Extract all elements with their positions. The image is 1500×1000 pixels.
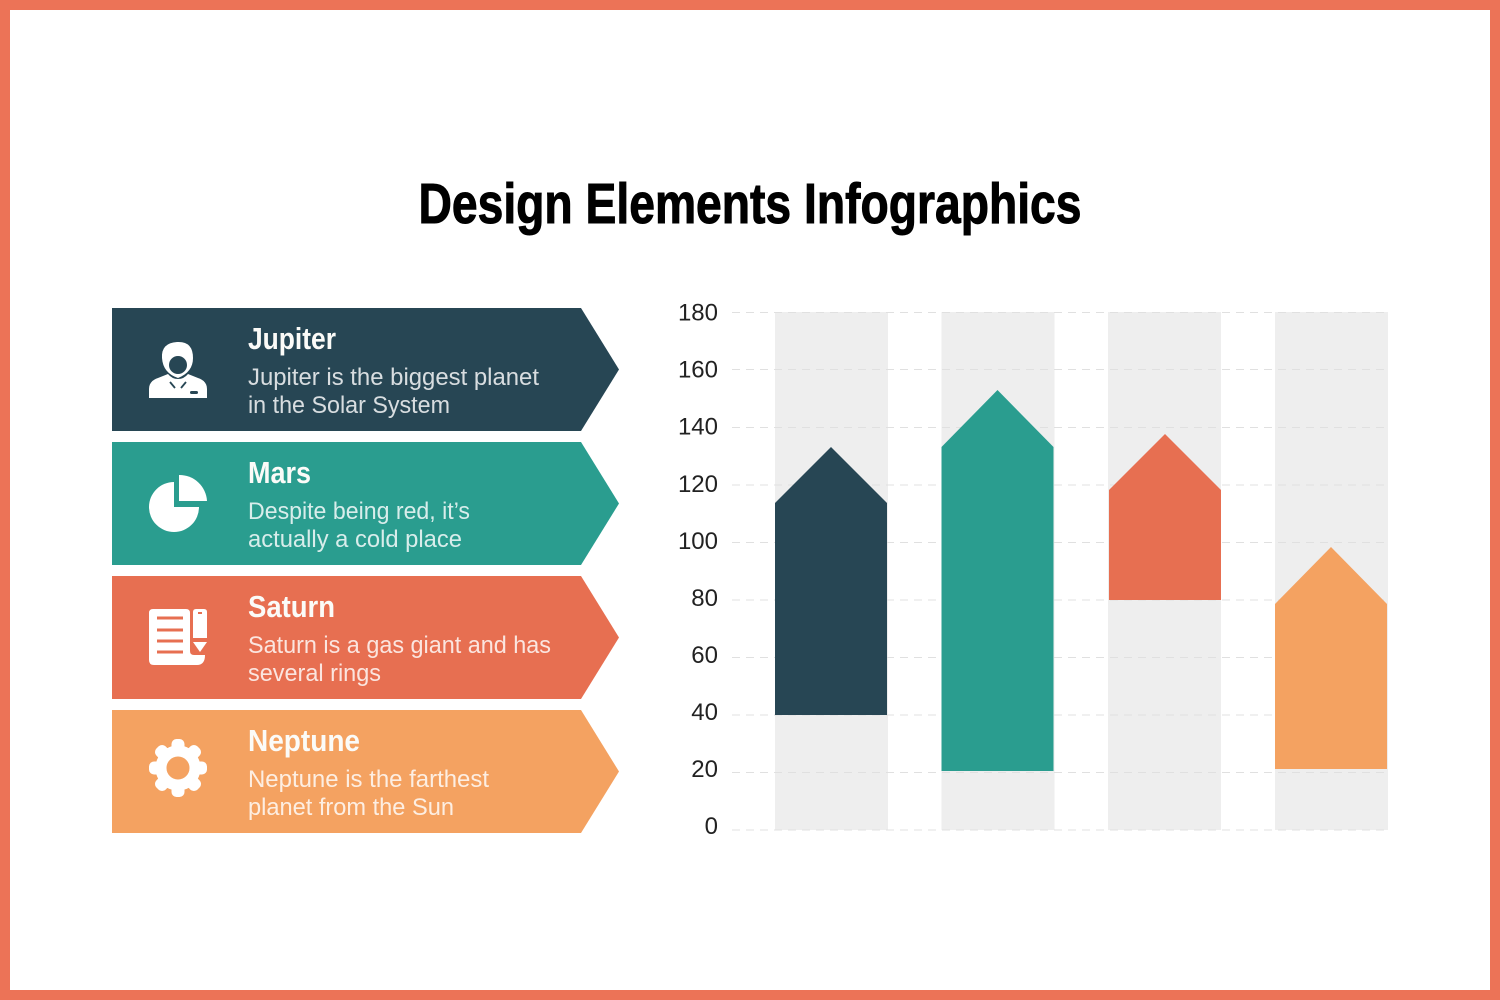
heading: Saturn: Saturn xyxy=(248,589,335,624)
y axis labels: 120 xyxy=(678,471,718,498)
bar: Jupiter xyxy=(775,447,887,715)
y axis labels: 140 xyxy=(678,414,718,440)
heading: Jupiter: Jupiter xyxy=(248,321,336,356)
panel: Saturn xyxy=(112,576,619,699)
y axis labels: 180 xyxy=(678,300,718,326)
y axis labels xyxy=(678,300,718,840)
y axis labels: 100 xyxy=(678,528,718,555)
heading: Mars: Mars xyxy=(248,455,311,490)
panel: Jupiter xyxy=(112,308,619,431)
text: Jupiter description: Jupiter is the biggest planet xyxy=(248,364,539,391)
bar: Saturn xyxy=(1109,434,1221,600)
heading: Neptune: Neptune xyxy=(248,723,360,758)
bar: Mars xyxy=(942,390,1054,771)
y axis labels: 60 xyxy=(691,642,718,669)
y axis labels: 40 xyxy=(691,699,718,726)
text: Jupiter description: in the Solar System xyxy=(248,392,450,419)
y axis labels: 20 xyxy=(691,756,718,783)
bar: Neptune xyxy=(1275,547,1387,769)
bar chart xyxy=(678,300,1388,840)
icon: pie chart xyxy=(149,475,207,532)
chart background columns xyxy=(775,312,1388,830)
y axis labels: 80 xyxy=(691,585,718,612)
text: Mars description: actually a cold place xyxy=(248,526,462,553)
text: Neptune description: Neptune is the farthest xyxy=(248,766,489,793)
icon: gear xyxy=(149,739,207,797)
text: Saturn description: several rings xyxy=(248,660,381,687)
panel: Mars xyxy=(112,442,619,565)
icon: document and pencil xyxy=(149,609,207,665)
y axis labels: 0 xyxy=(705,813,718,840)
title: Design Elements Infographics xyxy=(418,172,1082,236)
text: Neptune description: planet from the Sun xyxy=(248,794,454,821)
panel: arrow list xyxy=(112,308,619,833)
panel: Neptune xyxy=(112,710,619,833)
text: Saturn description: Saturn is a gas giant and has xyxy=(248,632,551,659)
y axis labels: 160 xyxy=(678,356,718,384)
text: Mars description: Despite being red, it’s xyxy=(248,498,470,525)
icon: person xyxy=(149,342,207,398)
